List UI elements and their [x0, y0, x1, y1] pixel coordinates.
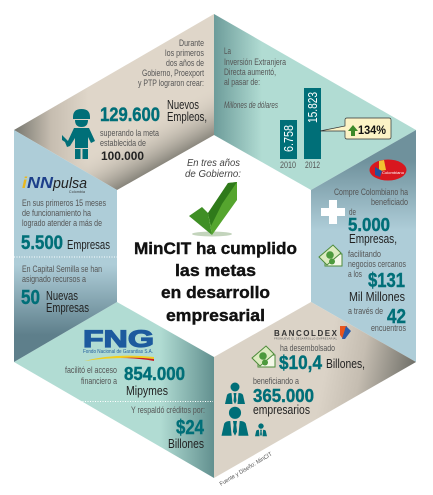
- panel: innpulsa (left): [14, 130, 117, 362]
- logo: fng: [83, 326, 154, 361]
- panel: bancoldex (bottom right): 365.000: [253, 386, 314, 406]
- panel: fng (bottom left): $24: [176, 417, 205, 439]
- panel: innpulsa (left): asignado recursos a: [22, 274, 87, 285]
- panel: inversión extranjera (top right): Inversión Extranjera: [224, 57, 287, 68]
- icon: worker: [62, 109, 95, 159]
- panel: fng (bottom left): financiero a: [81, 376, 118, 387]
- panel: compre colombiano (right): de: [349, 207, 356, 218]
- logo: bancoldex: PROMUEVE EL DESARROLLO EMPRESARIAL: [274, 338, 338, 340]
- title: las metas: [175, 261, 256, 280]
- panel: inversión extranjera (top right): al pasar de:: [224, 77, 260, 88]
- icon: money: [319, 245, 342, 266]
- panel: innpulsa (left): Nuevas: [46, 288, 78, 303]
- panel: compre colombiano (right): Empresas,: [349, 231, 397, 246]
- panel: bancoldex (bottom right): empresarios: [253, 402, 310, 417]
- panel: innpulsa (left): En sus primeros 15 meses: [22, 198, 106, 209]
- panel: compre colombiano (right): Compre Colombiano ha: [334, 187, 409, 198]
- panel: fng (bottom left): Y respaldó créditos por:: [131, 405, 205, 416]
- panel: empleos (top left): Nuevos: [167, 97, 199, 112]
- panel: compre colombiano (right): 42: [387, 306, 406, 328]
- logo: innpulsa: Colombia: [69, 190, 85, 194]
- panel: empleos (top left): Gobierno, Proexport: [142, 68, 204, 79]
- panel: innpulsa (left): 50: [21, 287, 40, 309]
- panel: bancoldex (bottom right): beneficiando a: [253, 376, 300, 387]
- panel: inversión extranjera (top right): [214, 14, 416, 190]
- title: [134, 239, 297, 325]
- callout: 134%: 134%: [358, 123, 386, 137]
- panel: empleos (top left): dos años de: [166, 58, 204, 69]
- icon: business people: [222, 382, 267, 436]
- panel: bancoldex (bottom right): Billones,: [326, 356, 365, 371]
- panel: innpulsa (left): 5.500: [21, 233, 63, 254]
- panel: empleos (top left): y PTP lograron crear:: [138, 78, 204, 89]
- intro text: de Gobierno:: [185, 168, 241, 180]
- title: en desarrollo: [161, 283, 270, 302]
- panel: compre colombiano (right): [311, 130, 416, 362]
- panel: compre colombiano (right): beneficiado: [371, 197, 408, 208]
- bar chart: 15.823: [306, 92, 320, 123]
- icon: money: [252, 346, 275, 367]
- bar chart: [280, 88, 321, 171]
- logo: fng: Fondo Nacional de Garantías S.A.: [83, 349, 153, 355]
- logo: compre colombiano: Colombiano: [382, 170, 405, 175]
- logo: bancoldex: [274, 326, 351, 340]
- panel: fng (bottom left): [14, 302, 214, 478]
- title: empresarial: [166, 306, 265, 325]
- intro text: En tres años: [187, 157, 241, 169]
- panel: innpulsa (left): de funcionamiento ha: [22, 208, 92, 219]
- panel: empleos (top left): [14, 14, 214, 190]
- logo: innpulsa: pulsa: [52, 175, 87, 192]
- panel: empleos (top left): Empleos,: [167, 109, 207, 124]
- bar chart: 2010: [280, 160, 296, 171]
- panel: innpulsa (left): En Capital Semilla se han: [22, 264, 102, 275]
- logo: fng: FNG: [83, 326, 154, 353]
- panel: fng (bottom left): facilitó el acceso: [65, 365, 117, 376]
- panel: fng (bottom left): Mipymes: [126, 383, 168, 398]
- panel: compre colombiano (right): facilitando: [348, 249, 381, 260]
- intro text: [185, 157, 241, 180]
- panel: empleos (top left): 100.000: [101, 149, 144, 163]
- panel: compre colombiano (right): a través de: [348, 306, 383, 317]
- panel: empleos (top left): 129.600: [100, 105, 160, 126]
- logo: innpulsa: iNN: [22, 175, 54, 192]
- logo: bancoldex: BANCOLDEX: [274, 329, 338, 338]
- panel: empleos (top left): los primeros: [165, 48, 204, 59]
- panel: compre colombiano (right): encuentros: [371, 323, 406, 334]
- panel: compre colombiano (right): negocios cercanos: [348, 259, 406, 270]
- panel: inversión extranjera (top right): Millones de dólares: [224, 100, 278, 111]
- panel: empleos (top left): establecida de: [100, 138, 146, 149]
- panel: innpulsa (left): logrado atender a más de: [22, 218, 102, 229]
- logo: innpulsa: [22, 175, 87, 194]
- callout: 134%: [320, 118, 391, 139]
- panel: compre colombiano (right): a los: [348, 269, 362, 280]
- icon: check mark: [189, 182, 237, 236]
- panel: compre colombiano (right): 5.000: [348, 215, 390, 235]
- panel: inversión extranjera (top right): Directa aumentó,: [224, 67, 276, 78]
- panel: inversión extranjera (top right): La: [224, 46, 231, 57]
- panel: empleos (top left): superando la meta: [100, 128, 160, 139]
- panel: innpulsa (left): Empresas: [46, 300, 89, 315]
- source credit: Fuente y Diseño: MinCIT: [219, 452, 274, 488]
- bar chart: 6.758: [282, 125, 296, 152]
- title: MinCIT ha cumplido: [134, 239, 297, 258]
- panel: bancoldex (bottom right): $10,4: [279, 353, 322, 374]
- panel: compre colombiano (right): $131: [368, 270, 405, 292]
- panel: bancoldex (bottom right): ha desembolsado: [280, 343, 335, 354]
- panel: fng (bottom left): Billones: [168, 436, 204, 451]
- bar chart: 2012: [305, 160, 320, 171]
- panel: empleos (top left): Durante: [179, 38, 204, 49]
- icon: plus: [321, 200, 345, 224]
- panel: fng (bottom left): 854.000: [124, 364, 185, 384]
- panel: bancoldex (bottom right): [214, 302, 416, 478]
- panel: innpulsa (left): Empresas: [67, 237, 110, 252]
- panel: compre colombiano (right): Mil Millones: [349, 289, 405, 304]
- logo: compre colombiano: [370, 160, 406, 180]
